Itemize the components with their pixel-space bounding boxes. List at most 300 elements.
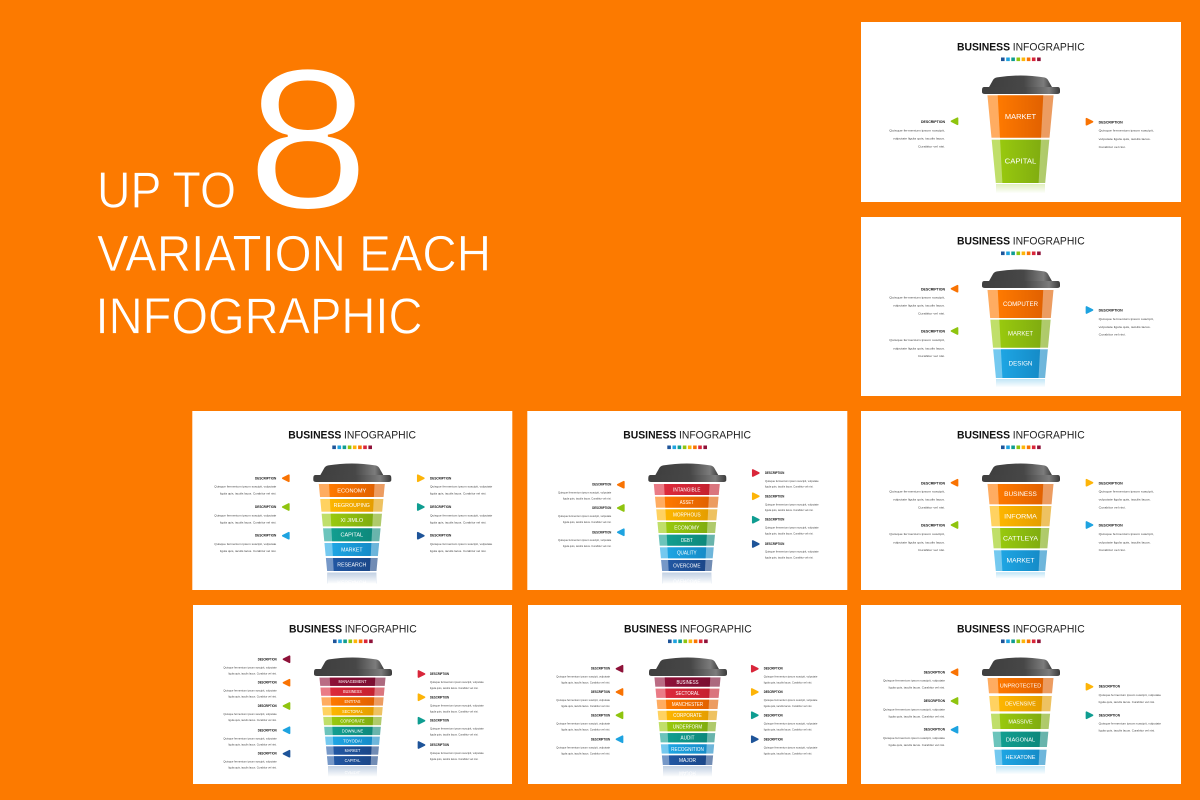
callout: left description 4: Quisque fermentum ipsum suscipit, vulputate <box>223 736 277 740</box>
band: MANCHESTER: MANCHESTER <box>672 702 703 708</box>
callout: right description 1: Quisque fermentum ipsum suscipit, vulputate <box>764 675 818 679</box>
band: CAPITAL: CAPITAL <box>340 533 363 539</box>
callout: left description 1: Quisque fermentum ipsum suscipit, vulputate <box>214 485 277 489</box>
panel: seven-step cup <box>527 411 847 590</box>
callout: left description <box>889 118 958 149</box>
callout: right description 4: ligula quis, iaculis lacus. Curabitur vel nisi. <box>764 751 812 755</box>
title: INFOGRAPHIC <box>679 429 751 441</box>
callout: right description 2: Quisque fermentum ipsum suscipit, vulputate <box>1099 722 1161 726</box>
cup reflection <box>996 379 1045 388</box>
band: DEVENSIVE: DEVENSIVE <box>1005 702 1036 708</box>
band: UNPROTECTED: UNPROTECTED <box>1000 684 1041 690</box>
callout: left description 5: DESCRIPTION <box>258 752 277 756</box>
colour dots <box>667 446 707 449</box>
callout: left description 3: DESCRIPTION <box>258 704 277 708</box>
title <box>288 429 416 441</box>
callout: right description 1: DESCRIPTION <box>430 476 452 480</box>
callout: right description 3: ligula quis, iaculis lacus. Curabitur vel nisi. <box>430 733 478 737</box>
callout: right description 3 <box>753 517 819 535</box>
band: XI JIMLO: XI JIMLO <box>340 518 364 524</box>
panel: six-step cup <box>192 411 512 590</box>
cup reflection <box>328 766 377 777</box>
band: HEXATONE <box>981 750 1061 765</box>
callout: left description 2: Quisque fermentum ipsum suscipit, vulputate <box>883 707 945 711</box>
band: XI JIMLO <box>322 514 382 526</box>
colour dots <box>1001 252 1041 255</box>
callout: right description 3: Quisque fermentum ipsum suscipit, vulputate <box>764 721 818 725</box>
icon: cup lid <box>982 464 1060 482</box>
band: MARKET: MARKET <box>1005 112 1037 121</box>
callout: right description 1: ligula quis, iaculis lacus. Curabitur vel nisi. <box>1099 700 1155 704</box>
band: ECONOMY <box>318 484 385 497</box>
callout: left description 2: ligula quis, iaculis lacus. Curabitur vel nisi. <box>889 714 945 718</box>
callout: left description: DESCRIPTION <box>921 120 946 124</box>
callout: right description 1: DESCRIPTION <box>430 672 450 676</box>
callout: right description 4: Quisque fermentum ipsum suscipit, vulputate <box>430 751 484 755</box>
callout: left description 1 <box>889 480 958 510</box>
colour dots <box>668 640 708 643</box>
icon: cup lid <box>314 658 392 676</box>
callout: right description 2: DESCRIPTION <box>430 505 452 509</box>
callout: right description 3: DESCRIPTION <box>764 713 783 717</box>
band: CORPORATE <box>648 711 728 720</box>
callout: right description 2 <box>418 504 493 524</box>
card background <box>861 22 1181 202</box>
callout: left description 2 <box>558 505 624 524</box>
title <box>623 429 751 441</box>
cup reflection: MAJOR <box>679 770 696 776</box>
band: QUALITY: QUALITY <box>677 551 697 557</box>
panel: nine-step cup <box>193 605 512 784</box>
callout: right description 1: DESCRIPTION <box>1099 481 1123 485</box>
callout: left description 3 <box>883 727 958 747</box>
band: CORPORATE: CORPORATE <box>673 713 702 719</box>
cup reflection <box>996 766 1045 774</box>
band: MARKET <box>990 320 1051 348</box>
callout: left description 2: ligula quis, iaculis lacus. Curabitur vel nisi. <box>228 695 277 699</box>
icon: cup lid <box>649 658 727 676</box>
callout: right description: Quisque fermentum ipsum suscipit, <box>1099 129 1154 133</box>
band: CATTLEYA: CATTLEYA <box>1003 536 1039 543</box>
band: OVERCOME <box>661 560 712 571</box>
band: RESEARCH <box>326 558 378 571</box>
band: REGROUPING: REGROUPING <box>334 503 370 509</box>
callout: right description 1: Quisque fermentum ipsum suscipit, vulputate <box>430 680 484 684</box>
callout: left description 5: ligula quis, iaculis lacus. Curabitur vel nisi. <box>228 766 277 770</box>
callout: right description 2: DESCRIPTION <box>430 695 450 699</box>
band: MARKET <box>994 550 1048 571</box>
band: CORPORATE <box>323 716 382 726</box>
cup reflection: CAPITAL <box>345 770 361 775</box>
callout: left description 1: DESCRIPTION <box>921 481 946 485</box>
callout: left description 1: ligula quis, iaculis lacus. Curabitur vel nisi. <box>228 671 277 675</box>
cup reflection <box>327 572 376 584</box>
callout: left description: vulputate ligula quis, iaculis lacus. <box>893 137 945 141</box>
card background <box>527 411 847 590</box>
callout: right description 3 <box>418 718 484 737</box>
colour dots <box>333 640 373 643</box>
band: INFORMA: INFORMA <box>1004 513 1037 520</box>
callout: right description 4: DESCRIPTION <box>764 737 783 741</box>
callout: left description 1: ligula quis, iaculis lacus. Curabitur vel nisi. <box>563 497 611 501</box>
callout: left description 1 <box>223 656 290 675</box>
callout: right description 2: ligula quis, iaculis lacus. Curabitur vel nisi. <box>1099 729 1155 733</box>
colour dots <box>1001 446 1041 449</box>
band: TOYODA!: TOYODA! <box>343 738 362 744</box>
callout: right description 1 <box>1086 684 1161 704</box>
callout: right description 1: Curabitur vel nisi. <box>1099 506 1126 510</box>
callout: left description 3 <box>214 533 289 553</box>
card background <box>861 217 1181 396</box>
callout: right description 3 <box>752 712 818 731</box>
callout: right description 2 <box>418 694 484 713</box>
band: OVERCOME: OVERCOME <box>673 563 701 569</box>
callout: left description 2 <box>889 328 958 358</box>
callout: left description 2 <box>883 698 958 718</box>
callout: left description 4: ligula quis, iaculis lacus. Curabitur vel nisi. <box>561 751 610 755</box>
band: INTANGIBLE <box>654 484 720 495</box>
colour dots <box>332 446 372 449</box>
band: MARKET: MARKET <box>1006 558 1034 565</box>
text: UP TO: UP TO <box>97 161 236 218</box>
callout: right description 2: ligula quis, iaculis lacus. Curabitur vel nisi. <box>765 508 813 512</box>
callout: left description 1: DESCRIPTION <box>258 657 277 661</box>
callout: left description 2: Quisque fermentum ipsum suscipit, vulputate <box>556 698 610 702</box>
band: MARKET: MARKET <box>341 547 363 553</box>
callout: left description 2: DESCRIPTION <box>924 699 946 703</box>
band: MANAGEMENT: MANAGEMENT <box>338 679 367 684</box>
band: CAPITAL <box>327 756 378 765</box>
callout: left description: Curabitur vel nisi. <box>918 145 945 149</box>
callout: right description 3: DESCRIPTION <box>430 534 452 538</box>
band: ENTITAS <box>321 697 384 706</box>
callout: right description 3: ligula quis, iaculis lacus. Curabitur vel nisi. <box>764 727 812 731</box>
callout: right description: Curabitur vel nisi. <box>1099 145 1126 149</box>
title <box>957 429 1085 441</box>
title: BUSINESS <box>957 623 1010 635</box>
callout: left description 1 <box>889 286 958 316</box>
band: MARKET <box>324 543 380 556</box>
callout: right description: vulputate ligula quis, iaculis lacus. <box>1099 325 1151 329</box>
band: ENTITAS: ENTITAS <box>344 699 361 704</box>
callout: right description 1: Quisque fermentum ipsum suscipit, <box>1099 489 1154 493</box>
band: DOWNLINE <box>324 726 381 736</box>
callout: left description 3: ligula quis, iaculis lacus. Curabitur vel nisi. <box>561 727 610 731</box>
band: AUDIT <box>648 733 728 742</box>
band: MORPHOUS: MORPHOUS <box>673 513 701 519</box>
title: BUSINESS <box>957 41 1010 53</box>
callout: left description 1: Quisque fermentum ipsum suscipit, vulputate <box>883 679 945 683</box>
callout: left description 1: Quisque fermentum ipsum suscipit, vulputate <box>223 665 277 669</box>
band: CAPITAL <box>992 140 1050 183</box>
callout: left description 1: DESCRIPTION <box>591 667 611 671</box>
callout: right description 2: DESCRIPTION <box>1099 713 1121 717</box>
callout: left description 1: DESCRIPTION <box>592 483 612 487</box>
band: QUALITY <box>660 547 714 558</box>
panel: two-step cup <box>861 22 1181 202</box>
callout: right description 2: Quisque fermentum ipsum suscipit, vulputate <box>765 502 819 506</box>
cup reflection: RESEARCH <box>337 578 366 584</box>
callout: left description 1: Quisque fermentum ipsum suscipit, vulputate <box>558 491 612 495</box>
title: INFOGRAPHIC <box>1013 429 1085 441</box>
band: COMPUTER: COMPUTER <box>1003 301 1038 308</box>
icon: cup lid <box>648 464 726 482</box>
band: MARKET <box>987 95 1054 138</box>
title: INFOGRAPHIC <box>345 623 417 635</box>
callout: left description 1: vulputate ligula quis, iaculis lacus. <box>893 498 945 502</box>
callout: left description 2 <box>889 522 958 552</box>
callout: right description 4 <box>752 736 818 755</box>
callout: right description 4: ligula quis, iaculis lacus. Curabitur vel nisi. <box>430 757 478 761</box>
callout: right description 3: DESCRIPTION <box>430 719 450 723</box>
callout: right description: DESCRIPTION <box>1099 120 1123 124</box>
cup reflection: OVERCOME <box>673 578 701 584</box>
band: BUSINESS <box>648 677 728 687</box>
callout: left description 2: DESCRIPTION <box>592 506 612 510</box>
band: CAPITAL <box>323 528 381 542</box>
callout: left description 2 <box>556 689 622 708</box>
callout: right description 3: ligula quis, iaculis lacus. Curabitur vel nisi. <box>765 531 813 535</box>
title <box>957 623 1085 635</box>
panel: eight-step cup <box>528 605 847 784</box>
callout: left description 1: ligula quis, iaculis lacus. Curabitur vel nisi. <box>889 686 945 690</box>
title: INFOGRAPHIC <box>1013 623 1085 635</box>
band: REGROUPING <box>320 499 384 512</box>
cup reflection <box>996 572 1045 579</box>
callout: left description 1 <box>214 475 289 496</box>
callout: right description 3: DESCRIPTION <box>765 518 785 522</box>
callout: left description 3 <box>558 529 624 548</box>
callout: left description 3: Quisque fermentum ipsum suscipit, vulputate <box>223 712 277 716</box>
band: RECOGNITION: RECOGNITION <box>671 747 704 753</box>
callout: left description 2: vulputate ligula quis, iaculis lacus. <box>893 540 945 544</box>
callout: left description 5: Quisque fermentum ipsum suscipit, vulputate <box>223 760 277 764</box>
band: SECTORAL <box>656 688 720 698</box>
band: CATTLEYA <box>992 528 1050 548</box>
callout: left description 1: ligula quis, iaculis lacus. Curabitur vel nisi. <box>220 492 276 496</box>
callout: right description 1 <box>752 666 818 685</box>
callout: left description 2: Quisque fermentum ipsum suscipit, vulputate <box>558 514 612 518</box>
title: INFOGRAPHIC <box>680 623 752 635</box>
callout: right description 4 <box>418 742 484 761</box>
callout: right description 2: DESCRIPTION <box>765 494 785 498</box>
band: CAPITAL: CAPITAL <box>1005 157 1036 166</box>
callout: right description 4: DESCRIPTION <box>765 542 785 546</box>
callout: left description 4: DESCRIPTION <box>591 737 611 741</box>
band: MORPHOUS <box>656 509 718 520</box>
callout: right description 2: Curabitur vel nisi. <box>1099 548 1126 552</box>
callout: right description 1: ligula quis, iaculis lacus. Curabitur vel nisi. <box>764 681 812 685</box>
callout: left description 4: DESCRIPTION <box>258 728 277 732</box>
callout: left description 3: Quisque fermentum ipsum suscipit, vulputate <box>558 538 612 542</box>
band: MARKET <box>326 746 379 755</box>
callout: right description 1 <box>1086 480 1154 510</box>
callout: left description 1: DESCRIPTION <box>924 670 946 674</box>
callout: left description 2: ligula quis, iaculis lacus. Curabitur vel nisi. <box>563 520 611 524</box>
card background <box>861 605 1181 784</box>
callout: left description 2: ligula quis, iaculis lacus. Curabitur vel nisi. <box>220 520 276 524</box>
callout: right description 3 <box>418 533 493 553</box>
band: BUSINESS <box>988 484 1054 504</box>
callout: right description 1 <box>418 671 484 690</box>
callout: right description 3: ligula quis, iaculis lacus. Curabitur vel nisi. <box>430 549 486 553</box>
band: DOWNLINE: DOWNLINE <box>342 728 363 734</box>
callout: left description 1: Curabitur vel nisi. <box>918 506 945 510</box>
band: INTANGIBLE: INTANGIBLE <box>673 487 701 493</box>
callout: left description 1: Quisque fermentum ipsum suscipit, <box>889 295 945 299</box>
callout: left description 2 <box>223 680 290 699</box>
band: DEVENSIVE <box>981 696 1061 711</box>
headline: up to 8 variation each infographic <box>96 28 491 345</box>
callout: left description 2: ligula quis, iaculis lacus. Curabitur vel nisi. <box>561 704 610 708</box>
title: BUSINESS <box>957 429 1010 441</box>
title: INFOGRAPHIC <box>344 429 416 441</box>
icon: cup lid <box>982 76 1060 94</box>
band: CAPITAL: CAPITAL <box>345 758 361 763</box>
band: UNPROTECTED <box>981 678 1061 693</box>
band: BUSINESS: BUSINESS <box>1004 491 1037 498</box>
callout: left description 2: DESCRIPTION <box>591 690 611 694</box>
band: MARKET: MARKET <box>345 748 361 753</box>
cup reflection <box>662 572 711 584</box>
band: DEBT <box>658 534 715 546</box>
colour dots <box>1001 640 1041 643</box>
callout: right description 2: ligula quis, iaculis lacus. Curabitur vel nisi. <box>764 704 812 708</box>
numeral 8: 8 <box>247 28 369 251</box>
callout: right description 4: Quisque fermentum ipsum suscipit, vulputate <box>764 745 818 749</box>
band: MARKET: MARKET <box>1008 331 1033 338</box>
callout: left description 2: Quisque fermentum ipsum suscipit, vulputate <box>214 513 277 517</box>
callout: right description 2: ligula quis, iaculis lacus. Curabitur vel nisi. <box>430 709 478 713</box>
callout: right description 1: Quisque fermentum ipsum suscipit, vulputate <box>1099 693 1161 697</box>
callout: left description 2: Quisque fermentum ipsum suscipit, <box>889 338 945 342</box>
callout: left description 1: Curabitur vel nisi. <box>918 312 945 316</box>
cup reflection <box>663 766 712 777</box>
callout: right description 1: vulputate ligula quis, iaculis lacus. <box>1099 498 1151 502</box>
callout: right description 4: ligula quis, iaculis lacus. Curabitur vel nisi. <box>765 556 813 560</box>
band: ECONOMY: ECONOMY <box>337 488 367 494</box>
callout: left description 1: DESCRIPTION <box>921 287 946 291</box>
band: UNDERFORM <box>648 722 728 731</box>
colour dots <box>1001 58 1041 61</box>
card background <box>193 605 512 784</box>
band: INFORMA <box>990 506 1052 526</box>
callout: left description 3: ligula quis, iaculis lacus. Curabitur vel nisi. <box>220 549 276 553</box>
title: BUSINESS <box>624 623 677 635</box>
card background <box>528 605 847 784</box>
title: BUSINESS <box>623 429 676 441</box>
callout: left description 3 <box>556 712 622 731</box>
callout: left description 2: DESCRIPTION <box>255 505 277 509</box>
title <box>624 623 752 635</box>
callout: left description 3: DESCRIPTION <box>591 713 611 717</box>
callout: right description 4 <box>753 541 819 560</box>
callout: left description 3: ligula quis, iaculis lacus. Curabitur vel nisi. <box>563 544 611 548</box>
band: DESIGN <box>993 349 1048 378</box>
band: DIAGONAL <box>981 732 1061 747</box>
callout: right description <box>1086 119 1154 149</box>
callout: right description 2 <box>1086 712 1161 733</box>
band: DESIGN: DESIGN <box>1009 360 1033 367</box>
band: ECONOMY <box>657 522 716 533</box>
text: INFOGRAPHIC: INFOGRAPHIC <box>96 288 422 345</box>
callout: right description 3: Quisque fermentum ipsum suscipit, vulputate <box>765 526 819 530</box>
band: TOYODA! <box>325 736 380 745</box>
title <box>957 41 1085 53</box>
callout: left description 3: Quisque fermentum ipsum suscipit, vulputate <box>214 542 277 546</box>
callout: left description 3: DESCRIPTION <box>924 728 946 732</box>
callout: right description: Quisque fermentum ipsum suscipit, <box>1099 317 1154 321</box>
band: DEBT: DEBT <box>681 538 693 544</box>
title: BUSINESS <box>957 235 1010 247</box>
callout: left description 1: DESCRIPTION <box>255 476 277 480</box>
band: SECTORAL: SECTORAL <box>342 709 363 714</box>
callout: right description 2: Quisque fermentum ipsum suscipit, <box>1099 532 1154 536</box>
callout: left description 2: Curabitur vel nisi. <box>918 548 945 552</box>
callout: left description 4: ligula quis, iaculis lacus. Curabitur vel nisi. <box>228 742 277 746</box>
callout: right description 2: ligula quis, iaculis lacus. Curabitur vel nisi. <box>430 520 486 524</box>
callout: left description 2: DESCRIPTION <box>258 681 277 685</box>
callout: left description 2: Curabitur vel nisi. <box>918 354 945 358</box>
callout: left description 3: ligula quis, iaculis lacus. Curabitur vel nisi. <box>889 743 945 747</box>
band: SECTORAL: SECTORAL <box>676 691 700 697</box>
callout: right description 2: Quisque fermentum ipsum suscipit, vulputate <box>430 703 484 707</box>
title: BUSINESS <box>288 429 341 441</box>
band: UNDERFORM: UNDERFORM <box>673 724 702 730</box>
callout: left description 3: DESCRIPTION <box>255 534 277 538</box>
title <box>957 235 1085 247</box>
callout: right description 2: vulputate ligula quis, iaculis lacus. <box>1099 540 1151 544</box>
panel: five-step cup <box>861 605 1181 784</box>
band: MANAGEMENT <box>320 678 386 686</box>
callout: left description 1 <box>556 666 622 685</box>
band: ASSET: ASSET <box>680 500 694 506</box>
callout: left description 3: Quisque fermentum ipsum suscipit, vulputate <box>556 721 610 725</box>
callout: left description 2 <box>214 504 289 524</box>
callout: left description 3: ligula quis, iaculis lacus. Curabitur vel nisi. <box>228 718 277 722</box>
band: HEXATONE: HEXATONE <box>1006 755 1036 761</box>
callout: left description 2: Quisque fermentum ipsum suscipit, <box>889 532 945 536</box>
callout: right description 1: Quisque fermentum ipsum suscipit, vulputate <box>765 479 819 483</box>
band: BUSINESS <box>320 688 385 696</box>
band: MAJOR: MAJOR <box>679 758 696 764</box>
callout: right description 2: DESCRIPTION <box>1099 523 1123 527</box>
callout: left description 1 <box>558 482 624 501</box>
callout: right description: Curabitur vel nisi. <box>1099 333 1126 337</box>
band: SECTORAL <box>322 707 383 716</box>
callout: left description 2: DESCRIPTION <box>921 523 946 527</box>
cup reflection <box>996 184 1045 194</box>
callout: right description: DESCRIPTION <box>1099 309 1123 313</box>
callout: left description 1: Quisque fermentum ipsum suscipit, <box>889 489 945 493</box>
callout: right description 2: DESCRIPTION <box>764 690 783 694</box>
band: RESEARCH: RESEARCH <box>337 562 366 568</box>
icon: cup lid <box>982 658 1060 676</box>
callout: right description 1: ligula quis, iaculis lacus. Curabitur vel nisi. <box>430 492 486 496</box>
callout: right description 2: Quisque fermentum ipsum suscipit, vulputate <box>430 513 493 517</box>
callout: left description 4 <box>556 736 622 755</box>
callout: left description 2: DESCRIPTION <box>921 329 946 333</box>
panel: four-step cup <box>861 411 1181 590</box>
band: DIAGONAL: DIAGONAL <box>1006 737 1036 743</box>
callout: right description 1: DESCRIPTION <box>1099 685 1121 689</box>
callout: right description 2 <box>1086 522 1154 552</box>
callout: left description 1: ligula quis, iaculis lacus. Curabitur vel nisi. <box>561 681 610 685</box>
callout: right description 2: Quisque fermentum ipsum suscipit, vulputate <box>764 698 818 702</box>
callout: right description 4: Quisque fermentum ipsum suscipit, vulputate <box>765 550 819 554</box>
callout: left description 4: Quisque fermentum ipsum suscipit, vulputate <box>556 745 610 749</box>
band: AUDIT: AUDIT <box>680 736 694 742</box>
